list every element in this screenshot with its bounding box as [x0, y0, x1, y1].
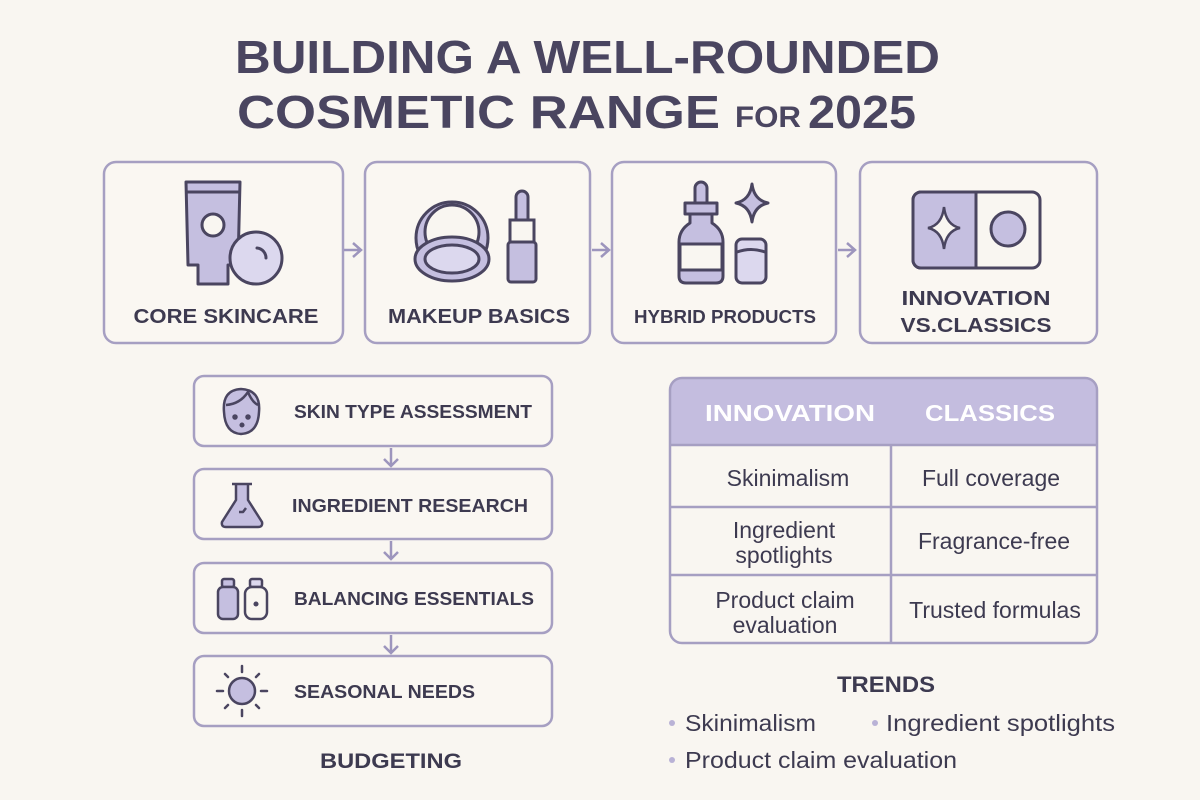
arrow — [344, 243, 361, 257]
arrow — [838, 243, 855, 257]
icon: face — [224, 389, 259, 434]
title: COSMETIC RANGE — [237, 86, 720, 138]
label: budgeting: BUDGETING — [320, 750, 462, 773]
flow: balancing essentials — [194, 563, 552, 633]
arrow — [384, 635, 398, 653]
icon: tube and jar — [186, 182, 282, 284]
panel: makeup basics: MAKEUP BASICS — [388, 306, 570, 328]
table: innovation vs classics: CLASSICS — [925, 400, 1055, 426]
panel: core skincare — [104, 162, 343, 343]
trends: Product claim evaluation — [685, 747, 957, 773]
flow: skin type assessment: SKIN TYPE ASSESSMENT — [294, 402, 532, 422]
table: innovation vs classics: Fragrance-free — [918, 528, 1070, 554]
title: FOR — [735, 101, 801, 134]
panel: core skincare: CORE SKINCARE — [134, 306, 318, 328]
title — [235, 31, 940, 138]
flow: seasonal needs: SEASONAL NEEDS — [294, 682, 475, 702]
table: innovation vs classics: spotlights — [735, 542, 833, 568]
icon: dropper bottle, sparkle, jar — [679, 182, 768, 283]
trends: Ingredient spotlights — [886, 710, 1115, 736]
title: BUILDING A WELL-ROUNDED — [235, 31, 940, 83]
arrow — [384, 448, 398, 466]
panel: hybrid products: HYBRID PRODUCTS — [634, 307, 816, 327]
panel: hybrid products — [612, 162, 836, 343]
flow: ingredient research — [194, 469, 552, 539]
trends: TRENDS — [837, 672, 935, 697]
panel: innovation vs classics: INNOVATION — [902, 288, 1050, 310]
flow: balancing essentials: BALANCING ESSENTIALS — [294, 589, 534, 609]
table: innovation vs classics: Ingredient — [733, 517, 836, 543]
arrow — [384, 541, 398, 559]
table: innovation vs classics: Full coverage — [922, 465, 1060, 491]
table: innovation vs classics: INNOVATION — [705, 400, 875, 426]
table: innovation vs classics: Trusted formulas — [909, 597, 1081, 623]
table: innovation vs classics: evaluation — [733, 612, 837, 638]
icon: flask — [222, 484, 262, 527]
title: 2025 — [808, 86, 916, 138]
trends — [669, 672, 1115, 773]
flow: skin type assessment — [194, 376, 552, 446]
panel: innovation vs classics: VS.CLASSICS — [900, 315, 1052, 337]
table: innovation vs classics: Product claim — [715, 587, 855, 613]
panel: makeup basics — [365, 162, 590, 343]
icon: bottles — [218, 579, 267, 619]
trends: Skinimalism — [685, 710, 816, 736]
flow: ingredient research: INGREDIENT RESEARCH — [292, 496, 528, 516]
icon: compact and lipstick — [415, 191, 536, 282]
panel: innovation vs classics — [860, 162, 1097, 343]
icon: split panel — [913, 192, 1040, 268]
flow: seasonal needs — [194, 656, 552, 726]
icon: sun — [217, 666, 267, 716]
table: innovation vs classics: Skinimalism — [727, 465, 849, 491]
table: innovation vs classics — [670, 378, 1097, 643]
arrow — [592, 243, 609, 257]
